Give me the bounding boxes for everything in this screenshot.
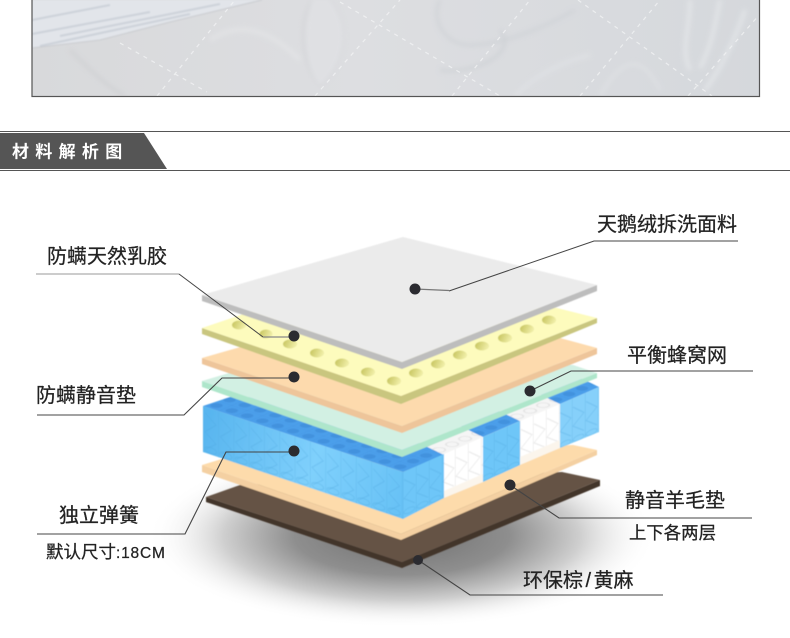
callout: 防螨静音垫 (36, 372, 300, 415)
callout: 静音羊毛垫: 上下各两层 (629, 523, 716, 543)
callout: 平衡蜂窝网 (524, 344, 753, 396)
callout: 防螨静音垫: 防螨静音垫 (36, 384, 136, 407)
callout: 独立弹簧: 独立弹簧 (59, 504, 139, 527)
quilting stitches (120, 0, 760, 96)
callout: 环保棕/黄麻: 环保棕/黄麻 (523, 569, 634, 592)
header tab (0, 133, 167, 169)
fabric piping band (32, 0, 262, 48)
callout: 独立弹簧: 默认尺寸:18CM (46, 542, 166, 562)
exploded mattress diagram (202, 237, 600, 568)
heading: 材料解析图: 材料解析图 (12, 142, 128, 162)
callout: 防螨天然乳胶 (36, 245, 300, 342)
layer: natural latex (202, 295, 597, 404)
callout: 静音羊毛垫: 静音羊毛垫 (625, 489, 725, 512)
layer: coir / jute base (206, 472, 600, 568)
layer: balance honeycomb mesh (202, 352, 597, 457)
layer: removable cover fabric (202, 237, 597, 369)
ground shadow (147, 444, 657, 628)
layer: anti-mite silent pad (202, 330, 597, 433)
spring side face (403, 387, 599, 519)
spring top faces (203, 375, 599, 472)
spring front face (203, 406, 403, 519)
section header band (0, 131, 790, 171)
callout: 天鹅绒拆洗面料: 天鹅绒拆洗面料 (597, 213, 737, 236)
embossed leaf pattern (70, 0, 745, 96)
layer: wool felt pad (202, 445, 597, 540)
callout: 天鹅绒拆洗面料 (410, 213, 738, 294)
latex holes (232, 316, 556, 386)
callout: 防螨天然乳胶: 防螨天然乳胶 (47, 245, 167, 268)
photo: quilted fabric close-up (32, 0, 760, 96)
layer: pocket springs (203, 375, 599, 519)
callout: 平衡蜂窝网: 平衡蜂窝网 (627, 344, 727, 367)
callout: 独立弹簧 (37, 446, 300, 562)
callout: 静音羊毛垫 (504, 480, 752, 543)
callout: 环保棕/黄麻 (413, 555, 663, 595)
